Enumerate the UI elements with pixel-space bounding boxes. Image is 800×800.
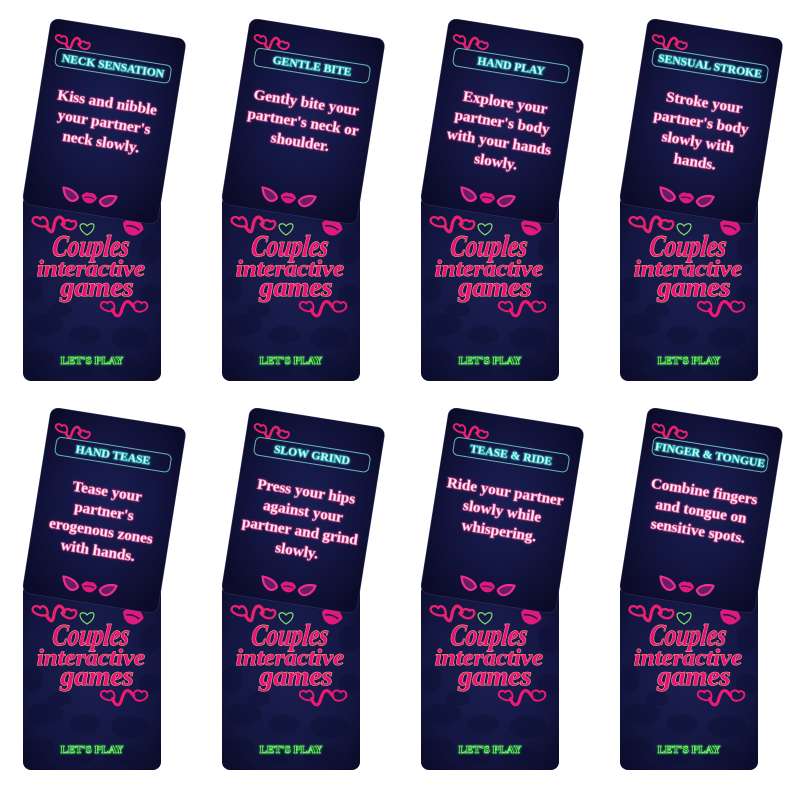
card front: partner's body: [652, 107, 750, 138]
card back: interactive: [236, 257, 344, 282]
card back: games: [656, 272, 731, 303]
card back: Couples: [648, 618, 728, 652]
card front: partner and grind: [241, 514, 360, 549]
card back: interactive: [634, 257, 742, 282]
card front: partner's neck or: [246, 105, 360, 140]
card back: [222, 584, 360, 770]
card back: Couples: [449, 618, 529, 652]
card front: sensitive spots.: [650, 515, 747, 547]
card front: NECK SENSATION: [61, 52, 166, 81]
card pair: hand play: [420, 18, 585, 381]
card front: [420, 407, 585, 614]
card front: slowly while: [462, 497, 543, 526]
card back: games: [258, 661, 333, 692]
card front: Gently bite your: [252, 86, 360, 119]
card back: LET'S PLAY: [260, 355, 322, 367]
card front: [619, 407, 784, 614]
card front: HAND PLAY: [476, 54, 546, 78]
card front: slowly with: [661, 128, 736, 156]
card front: against your: [262, 497, 344, 526]
card front: Tease your: [71, 478, 143, 506]
card back: games: [457, 661, 532, 692]
card back: LET'S PLAY: [658, 355, 720, 367]
card back: [421, 195, 559, 381]
card back: games: [258, 272, 333, 303]
card front: TEASE & RIDE: [469, 442, 553, 468]
card pair: slow grind: [221, 407, 386, 770]
card front: GENTLE BITE: [272, 54, 353, 79]
card front: SLOW GRIND: [273, 443, 351, 468]
card back: games: [656, 661, 731, 692]
card pair: neck sensation: [22, 18, 187, 381]
card front: [22, 407, 187, 614]
card pair: finger and tongue: [619, 407, 784, 770]
card front: partner's body: [453, 107, 551, 138]
card front: with your hands: [446, 126, 552, 159]
card back: games: [59, 272, 134, 303]
card front: whispering.: [460, 517, 538, 546]
card pair: gentle bite: [221, 18, 386, 381]
card back: [620, 584, 758, 770]
card front: [22, 18, 187, 225]
card back: LET'S PLAY: [658, 744, 720, 756]
card back: LET'S PLAY: [61, 744, 123, 756]
card back: LET'S PLAY: [260, 744, 322, 756]
card front: Explore your: [462, 88, 549, 118]
card back: Couples: [449, 229, 529, 263]
card back: LET'S PLAY: [459, 744, 521, 756]
card front: slowly.: [274, 539, 320, 563]
card back: LET'S PLAY: [459, 355, 521, 367]
card front: erogenous zones: [48, 515, 154, 548]
card front: Kiss and nibble: [56, 86, 158, 119]
card front: Stroke your: [665, 88, 744, 117]
card front: partner's: [73, 498, 135, 525]
card back: interactive: [236, 646, 344, 671]
card front: [619, 18, 784, 225]
card back: [23, 195, 161, 381]
card back: [23, 584, 161, 770]
card front: and tongue on: [654, 496, 748, 527]
card front: Press your hips: [256, 476, 357, 508]
card front: [420, 18, 585, 225]
card front: shoulder.: [270, 129, 331, 155]
card back: [222, 195, 360, 381]
card front: hands.: [672, 150, 717, 174]
card back: LET'S PLAY: [61, 355, 123, 367]
card front: with hands.: [59, 537, 136, 565]
card pair: tease and ride: [420, 407, 585, 770]
card back: interactive: [435, 646, 543, 671]
card front: slowly.: [473, 150, 519, 174]
card front: FINGER & TONGUE: [654, 440, 766, 470]
card back: games: [457, 272, 532, 303]
card front: Combine fingers: [650, 475, 759, 509]
card back: interactive: [634, 646, 742, 671]
card back: interactive: [37, 257, 145, 282]
card front: [221, 407, 386, 614]
card front: SENSUAL STROKE: [657, 52, 763, 81]
card back: interactive: [37, 646, 145, 671]
card back: Couples: [648, 229, 728, 263]
card front: your partner's: [56, 107, 152, 138]
card pair: hand tease: [22, 407, 187, 770]
card front: Ride your partner: [446, 474, 565, 509]
card back: Couples: [51, 229, 131, 263]
card back: [421, 584, 559, 770]
card front: HAND TEASE: [75, 443, 152, 468]
card back: games: [59, 661, 134, 692]
card back: Couples: [250, 229, 330, 263]
card back: Couples: [51, 618, 131, 652]
card front: neck slowly.: [61, 128, 141, 157]
card back: interactive: [435, 257, 543, 282]
card back: [620, 195, 758, 381]
card front: [221, 18, 386, 225]
card pair: sensual stroke: [619, 18, 784, 381]
card back: Couples: [250, 618, 330, 652]
